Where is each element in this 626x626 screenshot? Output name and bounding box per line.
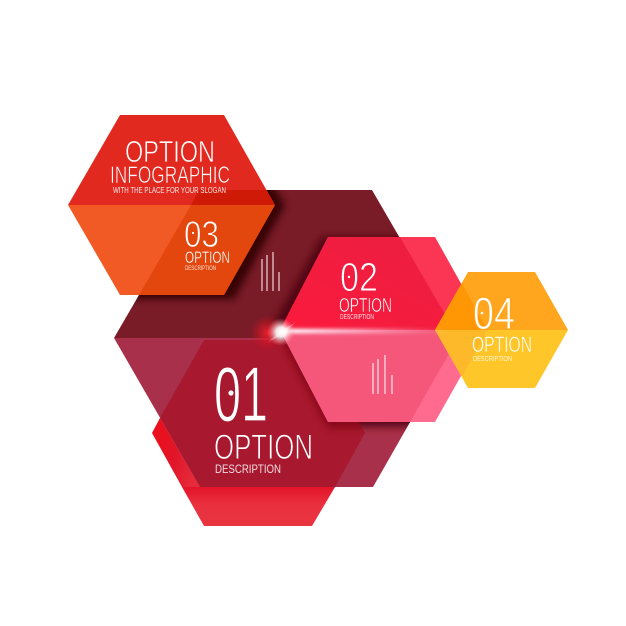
icon: bars on pink hexagon — [373, 355, 392, 394]
hexagon 04 — [435, 272, 568, 388]
label: option 03: 03 — [184, 214, 219, 255]
lower red hexagon — [152, 418, 335, 526]
label: option 01 — [214, 350, 313, 476]
big dark hexagon — [114, 190, 410, 487]
hexagon 01 overlap — [160, 330, 370, 487]
label: option 02: 02 — [340, 254, 378, 300]
label: option 03 — [184, 214, 230, 272]
heading: option infographic: OPTION — [125, 135, 215, 169]
heading: option infographic: INFOGRAPHIC — [110, 162, 230, 189]
label: option 02: OPTION — [339, 295, 392, 317]
heading: option infographic: WITH THE PLACE FOR YOUR SLOGAN — [113, 186, 226, 195]
label: option 02 — [339, 254, 392, 321]
label: option 03: OPTION — [185, 248, 230, 267]
label: option 01: OPTION — [214, 428, 313, 467]
label: option 02: DESCRIPTION — [340, 314, 374, 321]
hexagon 03 — [68, 115, 275, 295]
label: option 01: DESCRIPTION — [215, 462, 281, 476]
lens flare — [250, 315, 449, 351]
label: option 04: 04 — [473, 288, 515, 339]
hexagon 02 — [280, 237, 487, 422]
label: option 04: OPTION — [472, 332, 532, 357]
label: option 04: DESCRIPTION — [473, 354, 512, 363]
label: option 04 — [472, 288, 532, 363]
label: option 03: DESCRIPTION — [185, 265, 216, 272]
label: option 01: 01 — [214, 350, 268, 438]
icon: bars on dark hexagon — [262, 252, 279, 291]
heading: option infographic — [110, 135, 230, 195]
